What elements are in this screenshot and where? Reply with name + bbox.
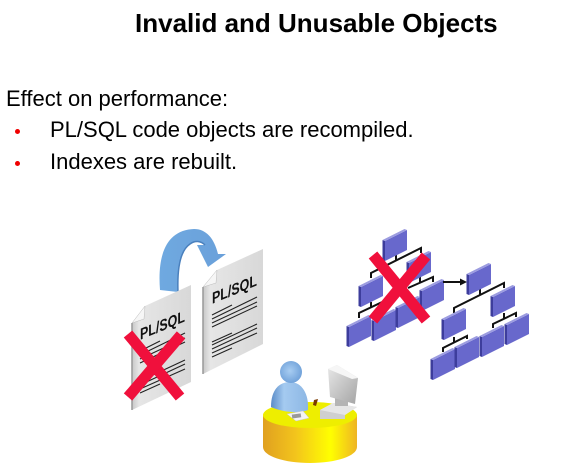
text block: effect on performance: Effect on performance:	[6, 86, 228, 111]
bullet list	[15, 117, 414, 174]
diagram: rebuilt index tree	[430, 263, 529, 380]
icon: valid PL/SQL document: PL/SQL	[212, 272, 257, 308]
icon: invalid PL/SQL document	[132, 285, 191, 410]
computer	[320, 365, 358, 419]
icon: red X over index tree	[373, 255, 426, 320]
title: Invalid and Unusable Objects	[135, 8, 498, 38]
document on desk	[287, 411, 309, 421]
person	[271, 361, 308, 412]
icon: invalid PL/SQL document: PL/SQL	[140, 308, 185, 344]
bullet 1	[15, 129, 20, 134]
diagram: invalid index tree	[346, 229, 444, 347]
bullet 2	[15, 161, 20, 166]
icon: user at yellow desk with computer	[263, 361, 358, 463]
bullet text 1: PL/SQL code objects are recompiled.	[50, 117, 414, 142]
icon: valid PL/SQL document	[203, 249, 263, 374]
bullet text 2: Indexes are rebuilt.	[50, 149, 237, 174]
icon: blue recompile arrow	[160, 229, 226, 292]
desk cylinder	[263, 402, 357, 463]
dark connector	[313, 399, 318, 406]
icon: red X over document	[128, 334, 181, 397]
arrow: old index to rebuilt index	[443, 278, 467, 286]
